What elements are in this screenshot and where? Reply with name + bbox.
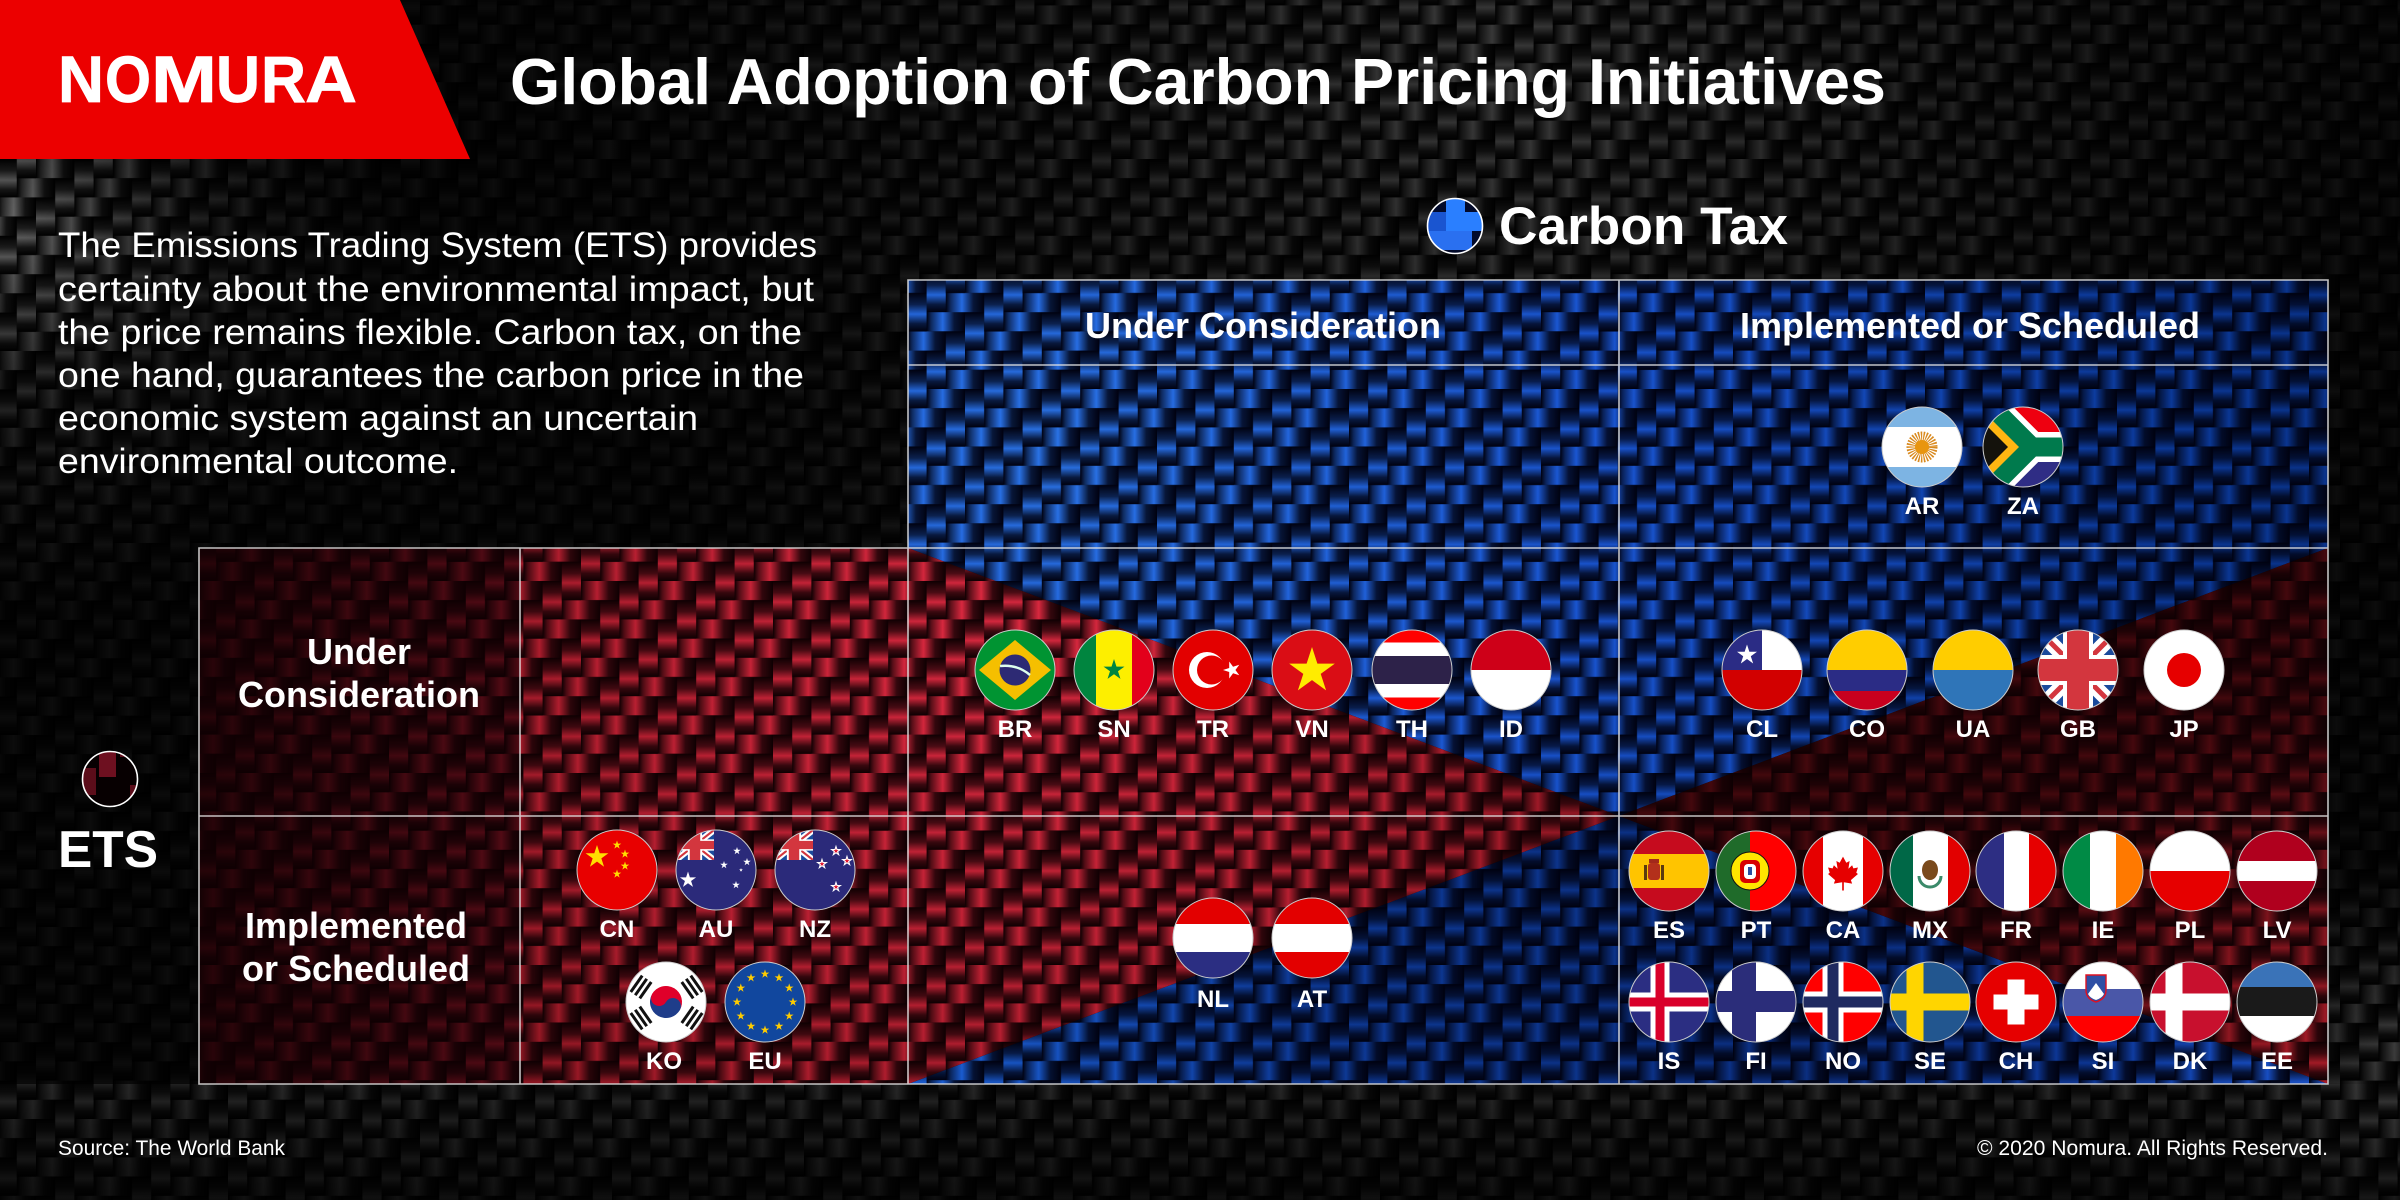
flag: IS bbox=[1629, 962, 1709, 1075]
flag: AU: AU bbox=[699, 916, 733, 943]
icon: ETS swatch bbox=[82, 751, 138, 807]
flag: EU: EU bbox=[748, 1048, 782, 1075]
flag: SI bbox=[2063, 962, 2143, 1075]
flag: CL: CL bbox=[1746, 716, 1778, 743]
flag: MX bbox=[1890, 831, 1970, 944]
matrix panel: dark red right wedge bbox=[1619, 548, 2328, 1084]
source note: Source: The World Bank bbox=[58, 1137, 285, 1160]
flag: AR bbox=[1882, 407, 1962, 520]
row header: under consideration: Under bbox=[307, 631, 411, 672]
logo wordmark: N bbox=[58, 42, 104, 116]
logo wordmark: O bbox=[105, 42, 151, 116]
flag: CN: CN bbox=[600, 916, 634, 943]
icon: carbon tax swatch bbox=[1427, 198, 1483, 254]
flag: CO bbox=[1827, 630, 1907, 743]
row header: implemented or scheduled: Implemented bbox=[245, 905, 467, 946]
matrix panel: red ETS wedge bbox=[520, 548, 1620, 1084]
heading: ETS: ETS bbox=[58, 821, 158, 879]
flag: NZ: NZ bbox=[799, 916, 831, 943]
intro text block: certainty about the environmental impact, but bbox=[58, 270, 814, 309]
copyright note: © 2020 Nomura. All Rights Reserved. bbox=[1977, 1137, 2328, 1160]
matrix panel: dark red ETS label column bbox=[199, 548, 520, 1084]
flag: SI: SI bbox=[2092, 1048, 2114, 1075]
flag: TR bbox=[1173, 630, 1253, 743]
flag: GB bbox=[2038, 630, 2118, 743]
flag: MX: MX bbox=[1912, 917, 1948, 944]
flag: NO bbox=[1803, 962, 1883, 1075]
flag: FI bbox=[1716, 962, 1796, 1075]
column header: under consideration: Under Consideration bbox=[1085, 305, 1441, 346]
intro text block bbox=[58, 226, 817, 481]
flag: DK bbox=[2150, 962, 2230, 1075]
flag: AR: AR bbox=[1905, 493, 1939, 520]
flag: BR: BR bbox=[998, 716, 1032, 743]
flag: TH: TH bbox=[1396, 716, 1428, 743]
flag: SE bbox=[1890, 962, 1970, 1075]
row header: implemented or scheduled: or Scheduled bbox=[242, 948, 470, 989]
flag: KO: KO bbox=[646, 1048, 682, 1075]
flag: NL: NL bbox=[1197, 986, 1229, 1013]
flag: FI: FI bbox=[1745, 1048, 1767, 1075]
flag: AT bbox=[1272, 898, 1352, 1013]
intro text block: the price remains flexible. Carbon tax, on the bbox=[58, 313, 802, 352]
flag: PL bbox=[2150, 831, 2230, 944]
flag: ID: ID bbox=[1499, 716, 1523, 743]
intro text block: economic system against an uncertain bbox=[58, 399, 698, 438]
flag: PT: PT bbox=[1741, 917, 1772, 944]
flag: CA: CA bbox=[1826, 917, 1860, 944]
flag: NZ bbox=[775, 830, 855, 943]
flag: SN: SN bbox=[1097, 716, 1131, 743]
flag: PL: PL bbox=[2175, 917, 2205, 944]
flag: ZA bbox=[1982, 406, 2064, 514]
flag: KO bbox=[626, 962, 706, 1075]
flag: CN bbox=[577, 830, 657, 943]
flag: ES bbox=[1629, 831, 1709, 944]
column header: implemented or scheduled: Implemented or Scheduled bbox=[1740, 305, 2200, 346]
flag: ID bbox=[1471, 630, 1551, 743]
intro text block: environmental outcome. bbox=[58, 442, 458, 481]
flag: JP bbox=[2144, 630, 2224, 743]
logo wordmark: M bbox=[151, 42, 217, 116]
flag: FR: FR bbox=[2000, 917, 2032, 944]
flag: TH bbox=[1372, 630, 1452, 743]
flag: ZA: ZA bbox=[2007, 493, 2039, 520]
flag: BR bbox=[975, 630, 1055, 743]
flag: NL bbox=[1173, 898, 1253, 1013]
flag: ES: ES bbox=[1653, 917, 1685, 944]
flag: VN: VN bbox=[1295, 716, 1329, 743]
flag: CH: CH bbox=[1999, 1048, 2033, 1075]
flag: AU bbox=[676, 830, 756, 943]
flag: EU bbox=[725, 962, 805, 1075]
logo banner bbox=[0, 0, 470, 159]
flag: SE: SE bbox=[1914, 1048, 1946, 1075]
row header: under consideration: Consideration bbox=[238, 674, 480, 715]
intro text block: one hand, guarantees the carbon price in the bbox=[58, 356, 804, 395]
flag: PT bbox=[1716, 831, 1796, 944]
logo wordmark: A bbox=[305, 42, 357, 116]
flag: LV bbox=[2237, 831, 2317, 944]
flag: CA bbox=[1803, 831, 1883, 944]
flag: NO: NO bbox=[1825, 1048, 1861, 1075]
flag: UA bbox=[1933, 630, 2013, 743]
flag: SN bbox=[1074, 630, 1154, 743]
flag: CO: CO bbox=[1849, 716, 1885, 743]
flag: IE: IE bbox=[2092, 917, 2114, 944]
heading: carbon tax: Carbon Tax bbox=[1499, 197, 1789, 256]
logo wordmark bbox=[58, 42, 357, 116]
flag: CL bbox=[1722, 630, 1802, 743]
flag: GB: GB bbox=[2060, 716, 2096, 743]
flag: IE bbox=[2063, 831, 2143, 944]
flag: LV: LV bbox=[2263, 917, 2291, 944]
flag: JP: JP bbox=[2169, 716, 2199, 743]
intro text block: The Emissions Trading System (ETS) provides bbox=[58, 226, 817, 265]
flag: IS: IS bbox=[1658, 1048, 1680, 1075]
flag: TR: TR bbox=[1197, 716, 1229, 743]
matrix panel: blue carbon tax wedges bbox=[908, 280, 2328, 1084]
title: Global Adoption of Carbon Pricing Initiatives bbox=[510, 46, 1886, 118]
flag: CH bbox=[1976, 962, 2056, 1075]
flag: EE bbox=[2237, 962, 2317, 1075]
flag: VN bbox=[1272, 630, 1352, 743]
flag: EE: EE bbox=[2261, 1048, 2293, 1075]
flag: UA: UA bbox=[1956, 716, 1990, 743]
flag: FR bbox=[1976, 831, 2056, 944]
flag: DK: DK bbox=[2173, 1048, 2208, 1075]
logo wordmark: R bbox=[261, 42, 306, 116]
logo wordmark: U bbox=[216, 42, 260, 116]
flag: AT: AT bbox=[1297, 986, 1327, 1013]
